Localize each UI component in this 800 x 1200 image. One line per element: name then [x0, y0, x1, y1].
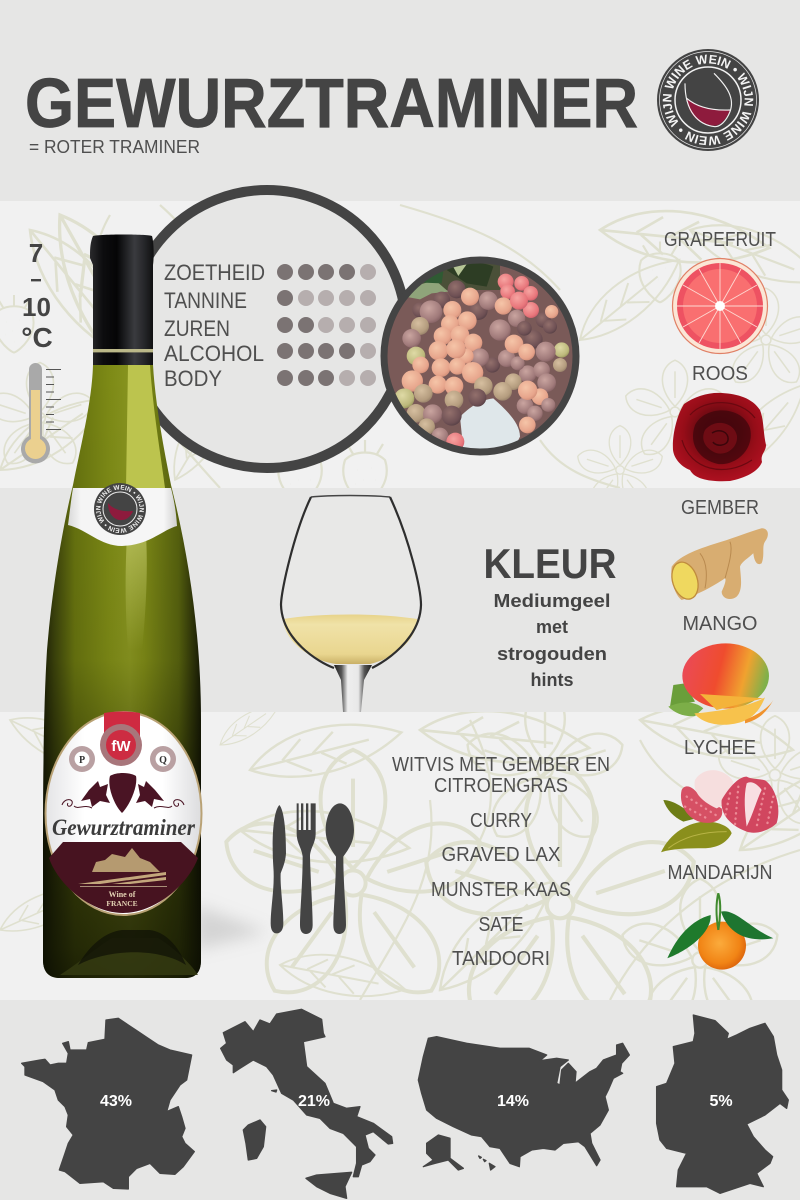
temperature: 7	[29, 238, 43, 268]
label name: Gewurztraminer	[52, 815, 196, 840]
bottle capsule	[90, 234, 154, 365]
aroma: rose	[673, 363, 766, 481]
aroma: grapefruit: GRAPEFRUIT	[664, 229, 776, 251]
subtitle: = ROTER TRAMINER	[29, 137, 200, 157]
food pairing list: WITVIS MET GEMBER EN	[392, 754, 610, 776]
aroma: lychee	[661, 737, 778, 852]
floral pattern bands	[0, 191, 800, 1039]
label origin: FRANCE	[106, 899, 138, 908]
panel: structure circle	[128, 190, 406, 468]
structure labels: ZOETHEID	[164, 260, 265, 285]
food pairing list	[392, 754, 610, 970]
label origin: Wine of	[109, 890, 136, 899]
structure labels: ZUREN	[164, 316, 230, 341]
label seal: fW	[111, 738, 131, 755]
temperature	[21, 238, 53, 353]
colour heading: KLEUR	[484, 540, 616, 587]
map: France 43%: 43%	[100, 1093, 132, 1110]
icon: cutlery	[271, 803, 354, 934]
label medal Q	[150, 746, 176, 772]
label seal	[100, 724, 142, 766]
map: Germany 5%	[657, 1015, 788, 1193]
structure labels: ALCOHOL	[164, 341, 264, 366]
wine glass	[281, 496, 421, 712]
aroma: ginger	[667, 497, 768, 603]
aroma: ginger: GEMBER	[681, 497, 759, 519]
colour description: strogouden	[497, 644, 607, 664]
food pairing list: TANDOORI	[452, 948, 550, 970]
food pairing list: CURRY	[470, 810, 532, 832]
label origin	[106, 890, 138, 908]
photo: grapes circle	[380, 257, 580, 453]
aroma: rose: ROOS	[692, 363, 748, 385]
glass outline	[281, 497, 421, 668]
aroma: grapefruit	[664, 229, 776, 354]
label medal Q: Q	[159, 755, 167, 766]
bottle shadow	[195, 905, 268, 950]
aroma: mandarin: MANDARIJN	[668, 862, 772, 884]
label medal P: P	[79, 755, 85, 766]
colour description	[494, 591, 610, 690]
aroma: lychee: LYCHEE	[684, 737, 756, 759]
glass wine	[283, 614, 417, 664]
label grapes	[62, 773, 184, 813]
bottle label	[46, 712, 202, 915]
food pairing list: GRAVED LAX	[442, 844, 560, 866]
map: USA 14%: 14%	[497, 1093, 529, 1110]
colour description: hints	[530, 670, 574, 690]
map: Italy 21%	[221, 1009, 393, 1198]
aroma: mango	[668, 613, 773, 725]
icon: thermometer	[21, 363, 61, 463]
wine bottle	[42, 234, 202, 978]
rating dots	[277, 264, 376, 386]
colour description: met	[536, 617, 568, 637]
map: USA 14%	[418, 1037, 629, 1170]
map: Italy 21%: 21%	[298, 1093, 330, 1110]
food pairing list: MUNSTER KAAS	[431, 879, 571, 901]
food pairing list: CITROENGRAS	[434, 775, 568, 797]
map: France 43%	[22, 1018, 194, 1189]
colour description: Mediumgeel	[494, 591, 610, 611]
neck label	[68, 488, 177, 546]
aroma: mandarin	[667, 862, 773, 970]
map: Germany 5%: 5%	[709, 1093, 733, 1110]
title: GEWURZTRAMINER	[25, 64, 638, 142]
logo badge: WINE WEIN • WIJN WINE WEIN • WIJN	[662, 54, 754, 146]
glass stem	[334, 665, 372, 712]
structure labels	[164, 260, 265, 391]
bottle glass	[43, 365, 201, 978]
structure labels: BODY	[164, 366, 222, 391]
neck badge: WINE WEIN • WIJN WINE WEIN • WIJN	[96, 484, 144, 534]
label medal P	[69, 746, 95, 772]
structure labels: TANNINE	[164, 288, 247, 313]
aroma: mango: MANGO	[682, 613, 758, 635]
temperature: °C	[21, 322, 53, 353]
temperature: 10	[22, 292, 51, 322]
label vineyard	[78, 848, 167, 887]
food pairing list: SATE	[478, 914, 524, 936]
